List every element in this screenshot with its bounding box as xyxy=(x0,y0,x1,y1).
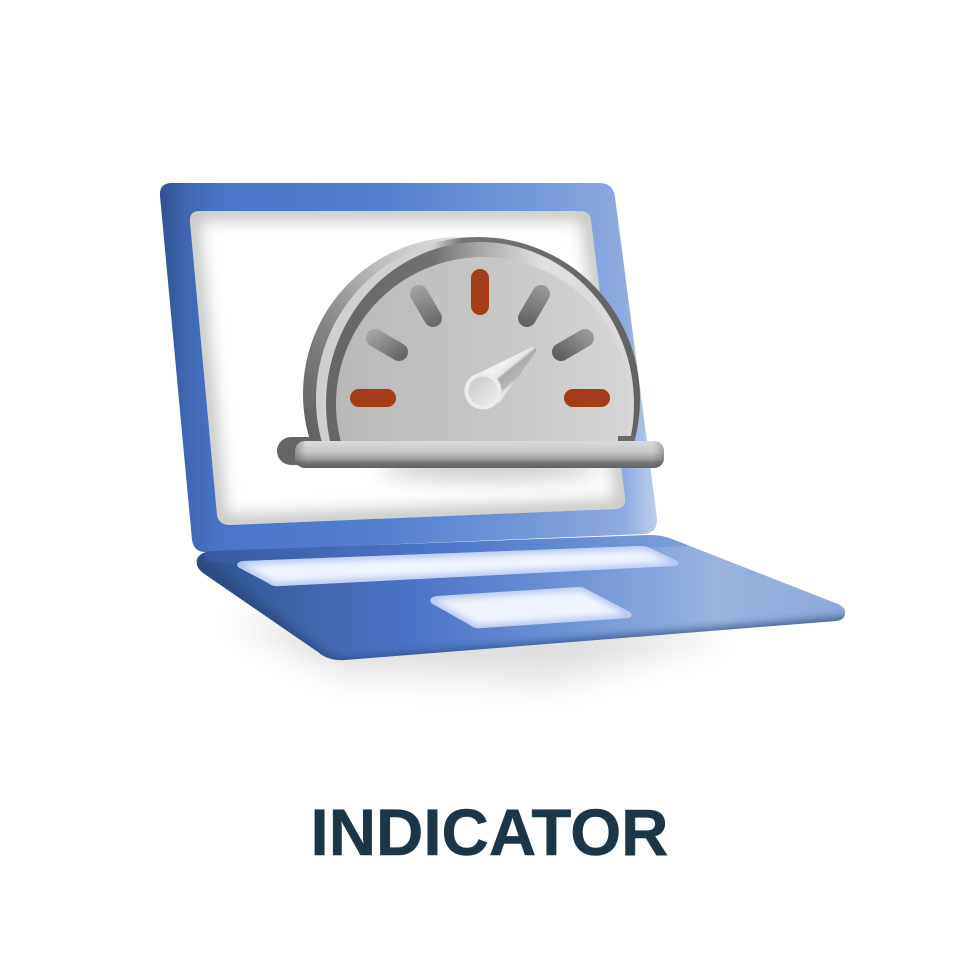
trackpad xyxy=(430,587,632,628)
laptop lid xyxy=(160,183,657,552)
red tick top xyxy=(471,278,489,306)
laptop base xyxy=(197,535,850,664)
gauge outer band xyxy=(316,237,640,441)
gauge xyxy=(277,237,664,468)
gauge corner patch xyxy=(618,436,631,441)
base bar shadow end xyxy=(277,437,321,465)
needle xyxy=(464,347,536,410)
shadow below gauge xyxy=(380,458,600,478)
gauge face xyxy=(336,257,603,441)
base bar xyxy=(295,441,664,468)
ticks xyxy=(359,278,601,398)
gray tick right xyxy=(561,338,585,352)
laptop xyxy=(160,183,850,680)
red tick right xyxy=(573,389,601,407)
title: INDICATOR xyxy=(310,795,668,869)
infographic: indicator icon with caption xyxy=(160,183,846,856)
gray tick upper left xyxy=(419,294,433,318)
laptop ground shadow xyxy=(230,612,730,680)
gray tick left xyxy=(375,338,399,352)
screen xyxy=(190,211,625,525)
gauge dial layers xyxy=(303,237,640,441)
gray tick upper right xyxy=(527,294,541,318)
red tick left xyxy=(359,389,387,407)
gauge back casing xyxy=(303,237,468,441)
keyboard xyxy=(237,546,678,586)
gauge ring xyxy=(326,242,634,441)
